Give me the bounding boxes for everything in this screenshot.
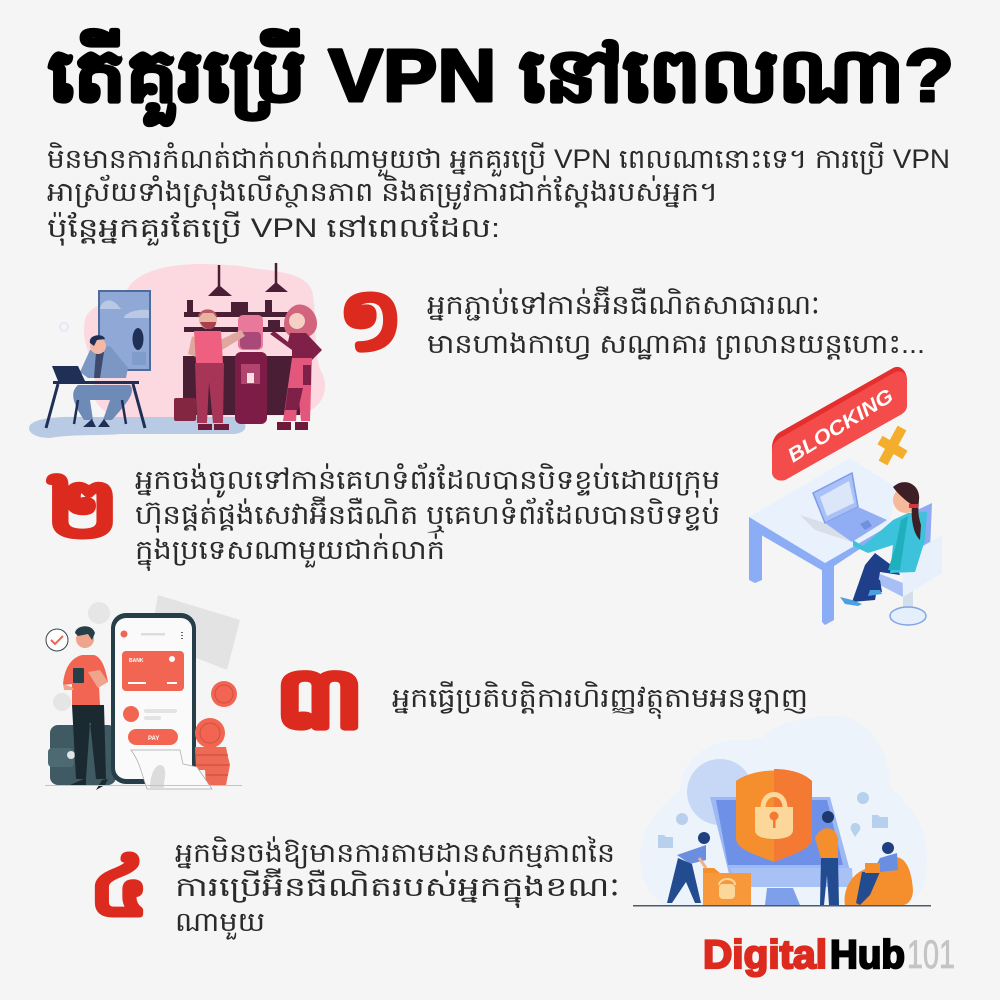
number 1: ១	[339, 273, 402, 368]
logo	[703, 933, 955, 977]
intro text block: មិនមានការកំណត់ជាក់លាក់ណាមួយថា អ្នកគួរប្រើ VPN ពេលណានោះទេ។ ការប្រើ VPN	[47, 142, 950, 177]
logo: Hub	[830, 933, 905, 977]
illustration: mobile payment	[45, 595, 242, 790]
point 1 text: អ្នកភ្ជាប់ទៅកាន់អ៊ីនធឺណិតសាធារណៈ	[427, 286, 820, 321]
point 3 text: អ្នកធ្វើប្រតិបត្តិការហិរញ្ញវត្ថុតាមអនឡាញ	[392, 681, 808, 719]
point 4 text: ការប្រើអ៊ីនធឺណិតរបស់អ្នកក្នុងខណៈ	[175, 868, 620, 908]
logo: 101	[907, 933, 955, 977]
point 4 text: ណាមួយ	[175, 907, 265, 940]
number 4: ៤	[90, 842, 148, 931]
point 2 text: ហ៊ុនផ្តត់ផ្គង់សេវាអ៊ីនធឺណិត ឬគេហទំព័រដែលបានបិទខ្ទប់	[135, 496, 720, 533]
point 2 text: អ្នកចង់ចូលទៅកាន់គេហទំព័រដែលបានបិទខ្ទប់ដោយក្រុម	[135, 462, 720, 498]
illustration: blocking	[749, 367, 942, 625]
number 3: ៣	[275, 651, 364, 745]
card label: BANK	[129, 658, 144, 664]
point 4 text	[175, 836, 620, 940]
pay label: PAY	[148, 736, 159, 742]
intro text block	[47, 142, 950, 246]
logo: Digital	[703, 933, 827, 977]
point 2 text	[135, 462, 720, 571]
point 2 text: ក្នុងប្រទេសណាមួយជាក់លាក់	[135, 533, 445, 571]
illustration: people in a cafe	[29, 263, 325, 438]
point 1 text: មានហាងកាហ្វេ សណ្ឋាគារ ព្រលានយន្តហោះ...	[427, 329, 925, 360]
number 2: ២	[47, 464, 118, 553]
title: តើគួរប្រើ VPN នៅពេលណា?	[48, 29, 954, 126]
intro text block: ប៉ុន្តែអ្នកគួរតែប្រើ VPN នៅពេលដែល:	[47, 211, 500, 246]
intro text block: អាស្រ័យទាំងស្រុងលើស្ថានភាព និងតម្រូវការជាក់ស្តែងរបស់អ្នក។	[47, 174, 718, 210]
badge label: BLOCKING	[784, 385, 897, 467]
illustration: data security	[633, 716, 931, 906]
point 4 text: អ្នកមិនចង់ឱ្យមានការតាមដានសកម្មភាពនៃ	[175, 836, 615, 869]
point 1 text	[427, 286, 925, 360]
